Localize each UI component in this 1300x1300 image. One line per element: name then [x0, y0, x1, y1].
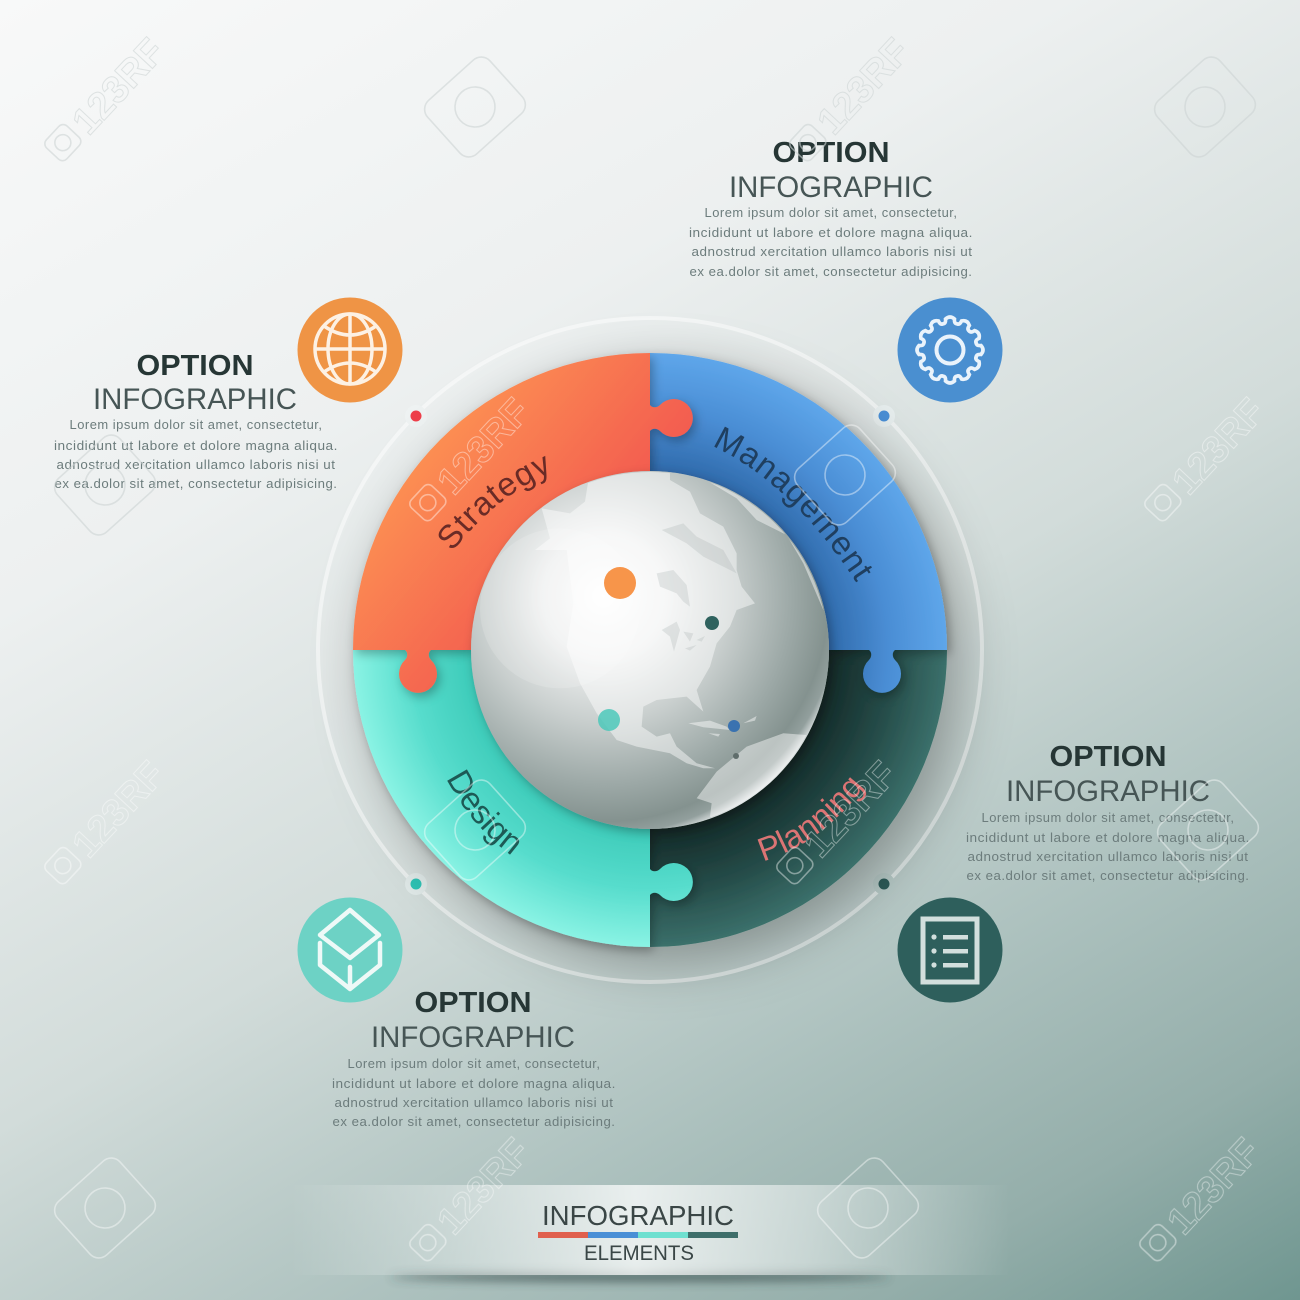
text block: bottom option: ex ea.dolor sit amet, consectetur adipisicing. [332, 1114, 616, 1129]
text block: bottom option: incididunt ut labore et dolore magna aliqua. [332, 1076, 616, 1091]
icon: cube [298, 898, 402, 1002]
text block: left option: Lorem ipsum dolor sit amet, consectetur, [70, 417, 322, 432]
watermark pattern: 123RF [797, 754, 905, 866]
watermark pattern: 123RF [1160, 1131, 1268, 1243]
segment: Strategy [353, 353, 693, 693]
text block: right option: Lorem ipsum dolor sit amet, consectetur, [982, 810, 1234, 825]
text block: top right option: Lorem ipsum dolor sit amet, consectetur, [704, 205, 958, 220]
watermark pattern: 123RF [430, 1131, 538, 1243]
segment labels: Strategy [438, 456, 546, 548]
segment labels [438, 426, 872, 861]
globe dots [598, 567, 740, 759]
text block: bottom option: adnostrud xercitation ullamco laboris nisi ut [334, 1095, 614, 1110]
text block: left option: incididunt ut labore et dolore magna aliqua. [54, 438, 338, 453]
text block: right option: ex ea.dolor sit amet, consectetur adipisicing. [966, 868, 1250, 883]
text block: bottom option: INFOGRAPHIC [371, 1021, 575, 1054]
icon: globe [298, 298, 402, 402]
segment: Design [353, 650, 693, 947]
puzzle ring [353, 353, 947, 947]
watermark pattern: 123RF [810, 31, 918, 143]
text block: right option: adnostrud xercitation ullamco laboris nisi ut [968, 849, 1248, 864]
text block: right option: OPTION [1050, 741, 1166, 773]
bottom banner: INFOGRAPHIC [542, 1200, 734, 1231]
segment labels: Management [714, 426, 872, 582]
segment labels: Design [447, 769, 520, 854]
globe highlight [480, 528, 640, 688]
text block: left option [54, 350, 338, 491]
segment labels: Planning [758, 777, 866, 861]
text block: right option: incididunt ut labore et dolore magna aliqua. [966, 830, 1250, 845]
text block: right option: INFOGRAPHIC [1006, 775, 1210, 808]
icon: gear [898, 298, 1002, 402]
text block: bottom option [332, 987, 616, 1129]
text block: right option [966, 741, 1250, 883]
text block: top right option: incididunt ut labore et dolore magna aliqua. [689, 225, 973, 240]
text block: top right option [689, 137, 973, 279]
globe [471, 467, 837, 829]
bottom banner: ELEMENTS [584, 1242, 694, 1265]
segment: Management [650, 353, 947, 693]
text block: top right option: INFOGRAPHIC [729, 171, 933, 204]
text block: left option: adnostrud xercitation ullamco laboris nisi ut [56, 457, 336, 472]
text block: top right option: adnostrud xercitation ullamco laboris nisi ut [692, 244, 972, 259]
text block: top right option: OPTION [772, 137, 890, 169]
watermark pattern: 123RF [1165, 391, 1273, 503]
text block: bottom option: OPTION [414, 987, 532, 1019]
bottom banner [290, 1185, 1010, 1281]
text block: bottom option: Lorem ipsum dolor sit amet, consectetur, [348, 1056, 600, 1071]
text block: left option: INFOGRAPHIC [93, 383, 297, 416]
text block: top right option: ex ea.dolor sit amet, consectetur adipisicing. [690, 264, 972, 279]
text block: left option: ex ea.dolor sit amet, consectetur adipisicing. [54, 476, 338, 491]
segment: Planning [650, 650, 947, 947]
watermark pattern: 123RF [65, 754, 173, 866]
watermark pattern: 123RF [430, 391, 538, 503]
world map land masses [536, 472, 824, 817]
text block: left option: OPTION [136, 350, 254, 382]
outer ring with connector dots [318, 318, 982, 982]
icon: document list [898, 898, 1002, 1002]
watermark pattern: 123RF [65, 31, 173, 143]
